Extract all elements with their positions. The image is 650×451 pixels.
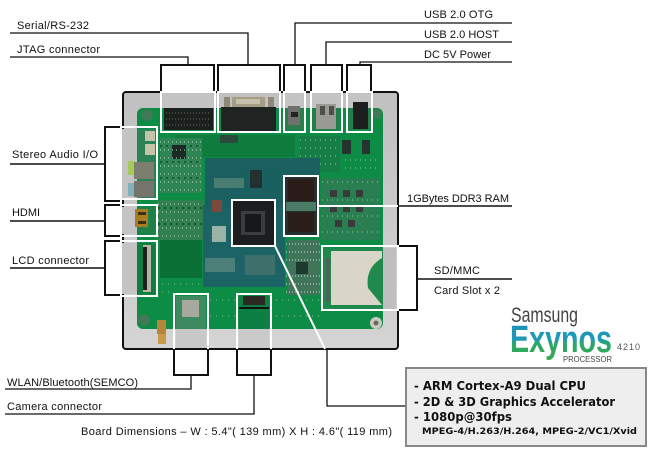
outline: DC jack	[347, 65, 371, 92]
green PCB	[137, 108, 383, 329]
feature: codecs: MPEG-4/H.263/H.264, MPEG-2/VC1/Xvid	[422, 427, 637, 437]
leader: RAM	[398, 205, 512, 207]
serial port	[219, 94, 278, 131]
outline: USB OTG	[284, 65, 305, 92]
leader: DC power	[360, 62, 512, 65]
label: USB host: USB 2.0 HOST	[424, 29, 499, 41]
highlight: camera	[237, 294, 271, 349]
feature: graphics: - 2D & 3D Graphics Accelerator	[414, 395, 615, 409]
logo: Samsung Exynos 4210	[510, 304, 640, 364]
highlight: USB OTG	[284, 92, 305, 132]
DDR3 RAM chips	[285, 177, 317, 235]
label: serial: Serial/RS-232	[17, 20, 89, 32]
leader: WLAN	[5, 375, 191, 389]
leader: stereo	[10, 163, 105, 165]
outline: serial	[218, 65, 280, 92]
outline: WLAN	[174, 350, 208, 375]
feature: video: - 1080p@30fps	[414, 410, 512, 424]
leader: SD	[417, 278, 512, 280]
logo number: 4210: 4210	[617, 342, 640, 352]
JTAG header	[163, 94, 213, 130]
leader lines	[5, 23, 512, 414]
outline: stereo audio	[105, 127, 120, 201]
outline: HDMI	[105, 205, 120, 236]
outline: JTAG	[161, 65, 214, 92]
highlight: stereo audio	[121, 127, 157, 199]
label: camera: Camera connector	[7, 401, 102, 413]
label: DC power: DC 5V Power	[424, 49, 491, 61]
leader: USB host	[326, 42, 512, 65]
audio connectors	[122, 129, 155, 198]
antenna connector	[157, 320, 166, 344]
USB OTG connector	[285, 94, 303, 130]
callout: CPU features	[406, 368, 646, 446]
logo word: Exynos: Exynos	[510, 319, 612, 361]
leader: CPU	[327, 349, 406, 406]
connector: RAM to edge	[318, 205, 398, 207]
USB host connector	[312, 94, 340, 130]
highlight: WLAN	[174, 294, 208, 349]
highlight: RAM	[284, 176, 318, 236]
label: board dimensions: Board Dimensions – W : 5.4"( 139 mm) X H : 4.6"( 119 mm)	[81, 426, 392, 438]
label: stereo: Stereo Audio I/O	[12, 149, 98, 161]
highlight: HDMI	[121, 205, 157, 236]
highlight: JTAG	[161, 92, 215, 132]
label: JTAG: JTAG connector	[17, 44, 100, 56]
leader: serial	[10, 33, 248, 65]
callout box	[406, 368, 646, 446]
label: card slot: Card Slot x 2	[434, 285, 500, 297]
highlight: SD slot	[322, 246, 398, 310]
labels	[7, 9, 509, 438]
WLAN module	[176, 296, 206, 348]
leader: camera	[5, 375, 254, 414]
logo word: Samsung: Samsung	[511, 304, 578, 327]
outline: USB host	[311, 65, 342, 92]
highlight: LCD	[121, 241, 157, 296]
LCD connector	[122, 243, 155, 294]
label: HDMI: HDMI	[12, 207, 40, 219]
leader: HDMI	[10, 220, 105, 222]
Exynos CPU chip	[233, 201, 274, 245]
callout outlines	[105, 65, 417, 375]
label: SD: SD/MMC	[434, 265, 480, 277]
blue CPU module	[203, 158, 320, 287]
highlight: USB host	[311, 92, 342, 132]
leader: USB OTG	[295, 23, 512, 65]
SD card slot	[324, 248, 396, 309]
HDMI connector	[122, 207, 155, 234]
outline: SD	[399, 246, 417, 310]
leader: LCD	[10, 267, 105, 269]
outline: camera	[237, 350, 271, 375]
grey backing plate	[123, 92, 398, 349]
feature: CPU: - ARM Cortex-A9 Dual CPU	[414, 379, 586, 393]
label: LCD: LCD connector	[12, 255, 89, 267]
logo word: processor: PROCESSOR	[563, 355, 612, 364]
connector: CPU to callout	[275, 246, 325, 349]
label: RAM: 1GBytes DDR3 RAM	[407, 193, 509, 205]
highlight: serial	[218, 92, 280, 132]
board photo	[122, 92, 398, 349]
camera connector	[239, 296, 269, 348]
outline: LCD	[105, 241, 120, 295]
highlight: CPU	[232, 200, 275, 246]
label: USB OTG: USB 2.0 OTG	[424, 9, 493, 21]
DC power jack	[348, 94, 371, 130]
white highlight boxes	[121, 92, 398, 349]
PCB component texture	[158, 140, 380, 316]
leader: JTAG	[10, 57, 188, 65]
label: WLAN: WLAN/Bluetooth(SEMCO)	[7, 377, 138, 389]
highlight: DC jack	[347, 92, 372, 132]
